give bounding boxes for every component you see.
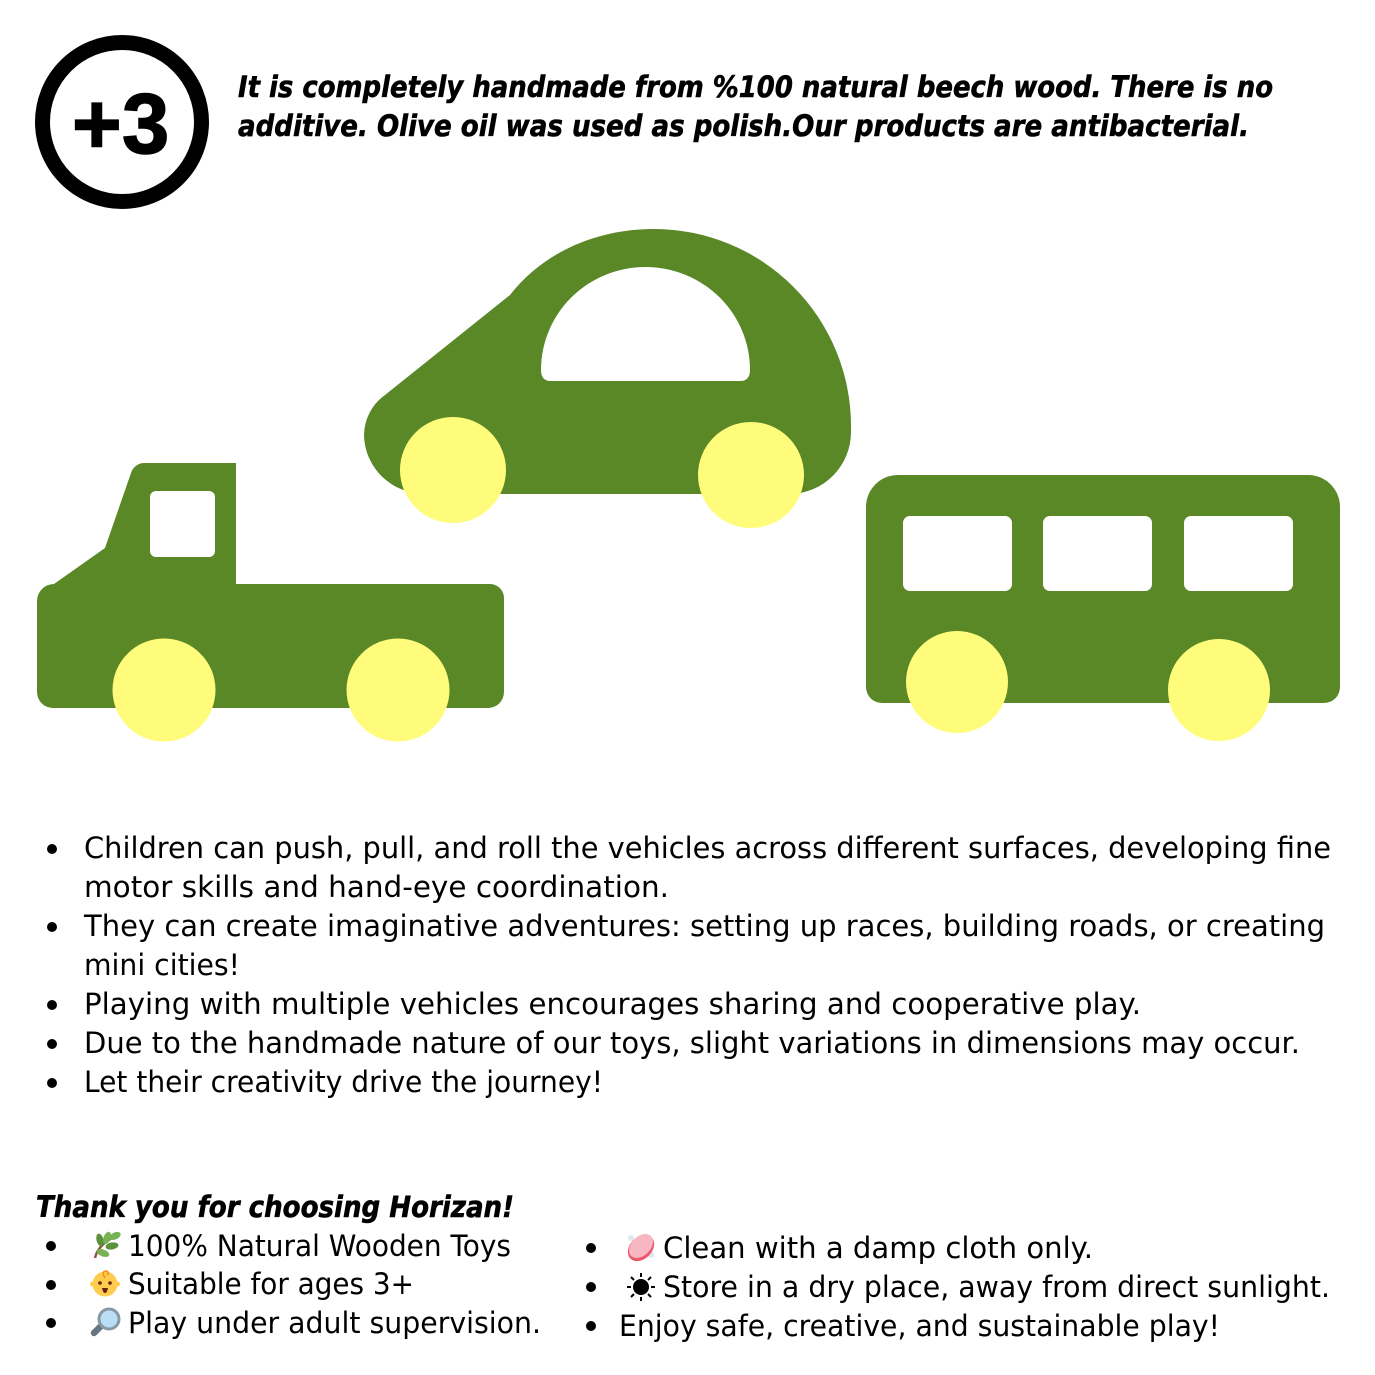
bullet list: play benefits: [47, 831, 1331, 1099]
bullet list: left safety notes: Play under adult supervision.: [128, 1306, 541, 1340]
heading: product description: It is completely handmade from %100 natural beech wood. There is no: [238, 70, 1273, 104]
icon: soap: [623, 1229, 659, 1266]
bullet list: right care notes: Enjoy safe, creative, and sustainable play!: [619, 1309, 1220, 1343]
illustration: green bus: [866, 475, 1340, 741]
bullet list: play benefits: Let their creativity drive the journey!: [84, 1065, 603, 1099]
icon: baby face: [90, 1271, 120, 1296]
heading: product description: [238, 70, 1273, 143]
bullet list: right care notes: [586, 1229, 1330, 1343]
bullet list: right care notes: Clean with a damp cloth only.: [663, 1231, 1093, 1265]
bullet list: left safety notes: 100% Natural Wooden Toys: [128, 1229, 511, 1263]
bullet list: left safety notes: Suitable for ages 3+: [128, 1267, 414, 1301]
bullet list: play benefits: Due to the handmade nature of our toys, slight variations in dimensions may occur.: [84, 1026, 1300, 1060]
icon: magnifying glass: [94, 1309, 119, 1333]
icon: age 3+ badge: +: [72, 77, 122, 172]
bullet list: play benefits: motor skills and hand-eye coordination.: [84, 870, 669, 904]
heading: thank you: Thank you for choosing Horizan!: [36, 1190, 514, 1224]
bullet list: play benefits: mini cities!: [84, 948, 240, 982]
bullet list: left safety notes: [46, 1229, 541, 1340]
icon: sun: [627, 1273, 655, 1301]
icon: age 3+ badge: [42, 42, 202, 202]
illustration: green car: [364, 229, 851, 528]
illustration: green truck: [37, 463, 504, 742]
icon: age 3+ badge: 3: [122, 77, 169, 172]
bullet list: play benefits: Playing with multiple vehicles encourages sharing and cooperative play.: [84, 987, 1141, 1021]
bullet list: right care notes: Store in a dry place, away from direct sunlight.: [663, 1270, 1330, 1304]
bullet list: play benefits: They can create imaginative adventures: setting up races, building roads, or creating: [83, 909, 1325, 943]
heading: product description: additive. Olive oil was used as polish.Our products are antibacterial.: [238, 109, 1249, 143]
icon: herb branch: [95, 1230, 122, 1259]
bullet list: play benefits: Children can push, pull, and roll the vehicles across different surfaces, developing fine: [84, 831, 1331, 865]
